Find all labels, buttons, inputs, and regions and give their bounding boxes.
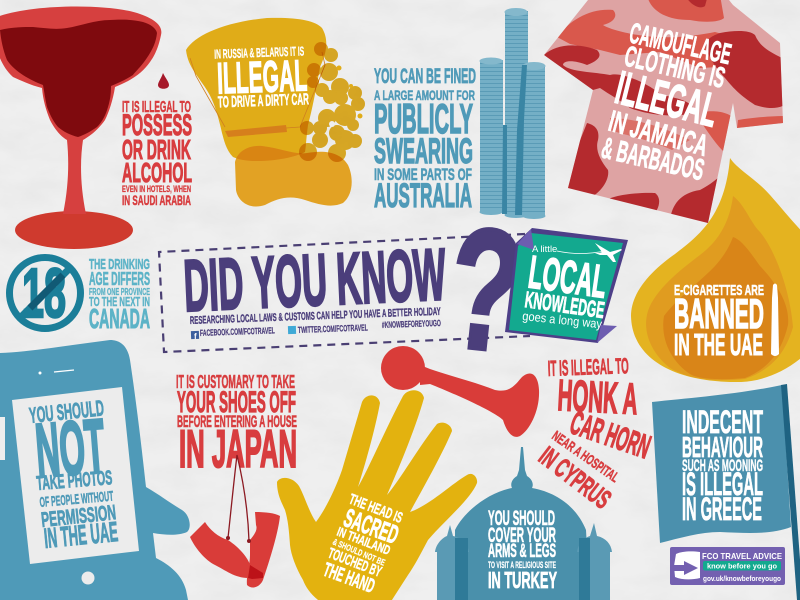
icon: dirty car xyxy=(186,18,365,207)
badge: FCO travel advice: FCO TRAVEL ADVICE xyxy=(702,551,782,561)
icon: camouflage t-shirt xyxy=(544,0,785,230)
icon: hand xyxy=(277,390,477,600)
text: IN THE UAE xyxy=(43,516,119,554)
text: Canada drinking age: CANADA xyxy=(89,303,150,334)
text: alcohol in Saudi Arabia: OR DRINK xyxy=(122,134,191,165)
text: no photos in UAE: OF PEOPLE WITHOUT xyxy=(39,488,114,510)
badge: a little local knowledge: KNOWLEDGE xyxy=(523,286,606,323)
text: COVER YOUR xyxy=(488,524,556,547)
text: shoes off in Japan: IT IS CUSTOMARY TO TAKE xyxy=(176,372,295,392)
badge: FCO travel advice: gov.uk/knowbeforeyougo xyxy=(703,574,782,583)
badge: FCO travel advice xyxy=(670,547,785,585)
text: no photos in UAE: TAKE PHOTOS xyxy=(36,467,113,495)
text: BEFORE ENTERING A HOUSE xyxy=(177,412,297,431)
text: alcohol in Saudi Arabia: IT IS ILLEGAL TO xyxy=(122,99,191,116)
text: car horn in Cyprus: IN CYPRUS xyxy=(533,441,617,515)
text: indecent behaviour in Greece xyxy=(682,404,763,527)
text: cover arms in Turkey: ARMS & LEGS xyxy=(488,541,556,562)
text: head sacred in Thailand: IN THAILAND xyxy=(335,524,393,558)
text: Canada drinking age: THE DRINKING xyxy=(89,256,150,273)
text: no photos in UAE: YOU SHOULD xyxy=(28,395,105,428)
text: DID YOU KNOW xyxy=(182,234,447,327)
text: public swearing in Australia xyxy=(374,65,476,215)
icon: facebook: f xyxy=(194,332,197,341)
icon: no under 18 sign xyxy=(10,254,80,332)
icon: FCO arrow xyxy=(674,551,700,579)
text: public swearing in Australia: IN SOME PARTS OF xyxy=(374,165,472,184)
text: head sacred in Thailand: THE HEAD IS xyxy=(347,491,405,527)
text: researching local laws: RESEARCHING LOCAL LAWS & CUSTOMS CAN HELP YOU HAVE A BETTER HOLIDAY xyxy=(190,306,441,327)
text: YOUR SHOES OFF xyxy=(177,386,296,419)
social links: TWITTER.COM/FCOTRAVEL xyxy=(298,323,368,335)
text: cover arms in Turkey: IN TURKEY xyxy=(488,567,557,593)
text: dirty car illegal: IN RUSSIA & BELARUS IT IS xyxy=(214,43,305,62)
text: PUBLICLY xyxy=(374,95,473,142)
icon: smartphone and hand xyxy=(0,340,190,600)
text: public swearing in Australia: YOU CAN BE FINED xyxy=(374,65,476,88)
text: dirty car illegal xyxy=(214,43,309,112)
icon: car horn xyxy=(381,346,539,437)
text: no photos in UAE: PERMISSION xyxy=(40,501,117,532)
text: Canada drinking age: AGE DIFFERS xyxy=(89,269,150,289)
icon: mosque xyxy=(435,447,612,600)
icon: question mark: ? xyxy=(440,191,531,390)
icon: flame xyxy=(631,158,800,382)
text: CAR HORN xyxy=(566,404,655,465)
text: no photos in UAE: NOT xyxy=(33,404,108,494)
text: dirty car illegal: TO DRIVE A DIRTY CAR xyxy=(218,91,309,111)
dashed border xyxy=(159,234,530,352)
text: alcohol in Saudi Arabia xyxy=(122,99,192,208)
text: ILLEGAL xyxy=(216,51,308,103)
text: cover arms in Turkey: TO VISIT A RELIGIOUS SITE xyxy=(488,560,556,570)
icon: hanging shoes xyxy=(190,455,280,587)
icon: flag xyxy=(652,384,800,600)
text: Canada drinking age: FROM ONE PROVINCE xyxy=(89,287,150,298)
icon: twitter xyxy=(288,326,296,334)
icon: cocktail glass xyxy=(0,6,161,249)
text: head sacred in Thailand: SACRED xyxy=(340,502,403,550)
text: car horn in Cyprus: NEAR A HOSPITAL xyxy=(549,427,623,485)
text: head sacred in Thailand xyxy=(320,491,405,598)
text: IN JAPAN xyxy=(179,420,297,479)
icon: drop xyxy=(158,73,169,89)
text: car horn in Cyprus: IT IS ILLEGAL TO xyxy=(547,353,629,381)
text: public swearing in Australia: AUSTRALIA xyxy=(374,177,472,215)
social links: #KNOWBEFOREYOUGO xyxy=(382,318,441,330)
text: POSSESS xyxy=(122,109,192,142)
icon: e-cigarette xyxy=(771,284,779,356)
icon: no under 18 sign: 18 xyxy=(22,254,66,332)
text: car horn in Cyprus xyxy=(533,353,655,515)
text: public swearing in Australia: SWEARING xyxy=(374,132,473,171)
text: camouflage clothing illegal xyxy=(598,18,734,187)
text: public swearing in Australia: A LARGE AMOUNT FOR xyxy=(374,88,475,103)
text: Canada drinking age xyxy=(89,256,150,334)
text: head sacred in Thailand: & SHOULD NOT BE xyxy=(331,537,387,568)
text: alcohol in Saudi Arabia: ALCOHOL xyxy=(122,157,192,188)
text: YOU SHOULD xyxy=(488,507,555,530)
badge: a little local knowledge: LOCAL xyxy=(526,245,610,308)
text: Canada drinking age: TO THE NEXT IN xyxy=(89,294,150,309)
text: alcohol in Saudi Arabia: EVEN IN HOTELS, WHEN xyxy=(122,184,191,195)
text: alcohol in Saudi Arabia: IN SAUDI ARABIA xyxy=(122,192,191,208)
badge: FCO travel advice: know before you go xyxy=(707,562,777,570)
text: e-cigarettes banned xyxy=(674,282,779,362)
text: head sacred in Thailand: TOUCHED BY xyxy=(326,545,384,581)
social links: FACEBOOK.COM/FCOTRAVEL xyxy=(200,325,275,338)
text: car horn in Cyprus: HONK A xyxy=(556,371,639,424)
text: cover arms in Turkey xyxy=(488,507,557,593)
text: shoes off in Japan xyxy=(176,372,297,479)
badge: a little local knowledge xyxy=(505,228,628,343)
text: camouflage clothing illegal: & BARBADOS xyxy=(598,132,707,187)
text: no photos in UAE xyxy=(28,395,119,554)
badge: a little local knowledge: A little xyxy=(532,244,557,255)
icon: facebook xyxy=(191,331,199,341)
icon: plane xyxy=(595,243,622,262)
text: camouflage clothing illegal: IN JAMAICA xyxy=(605,105,711,163)
badge: a little local knowledge: goes a long way xyxy=(522,309,603,331)
social links xyxy=(191,318,441,341)
icon: coin stacks xyxy=(480,8,546,219)
